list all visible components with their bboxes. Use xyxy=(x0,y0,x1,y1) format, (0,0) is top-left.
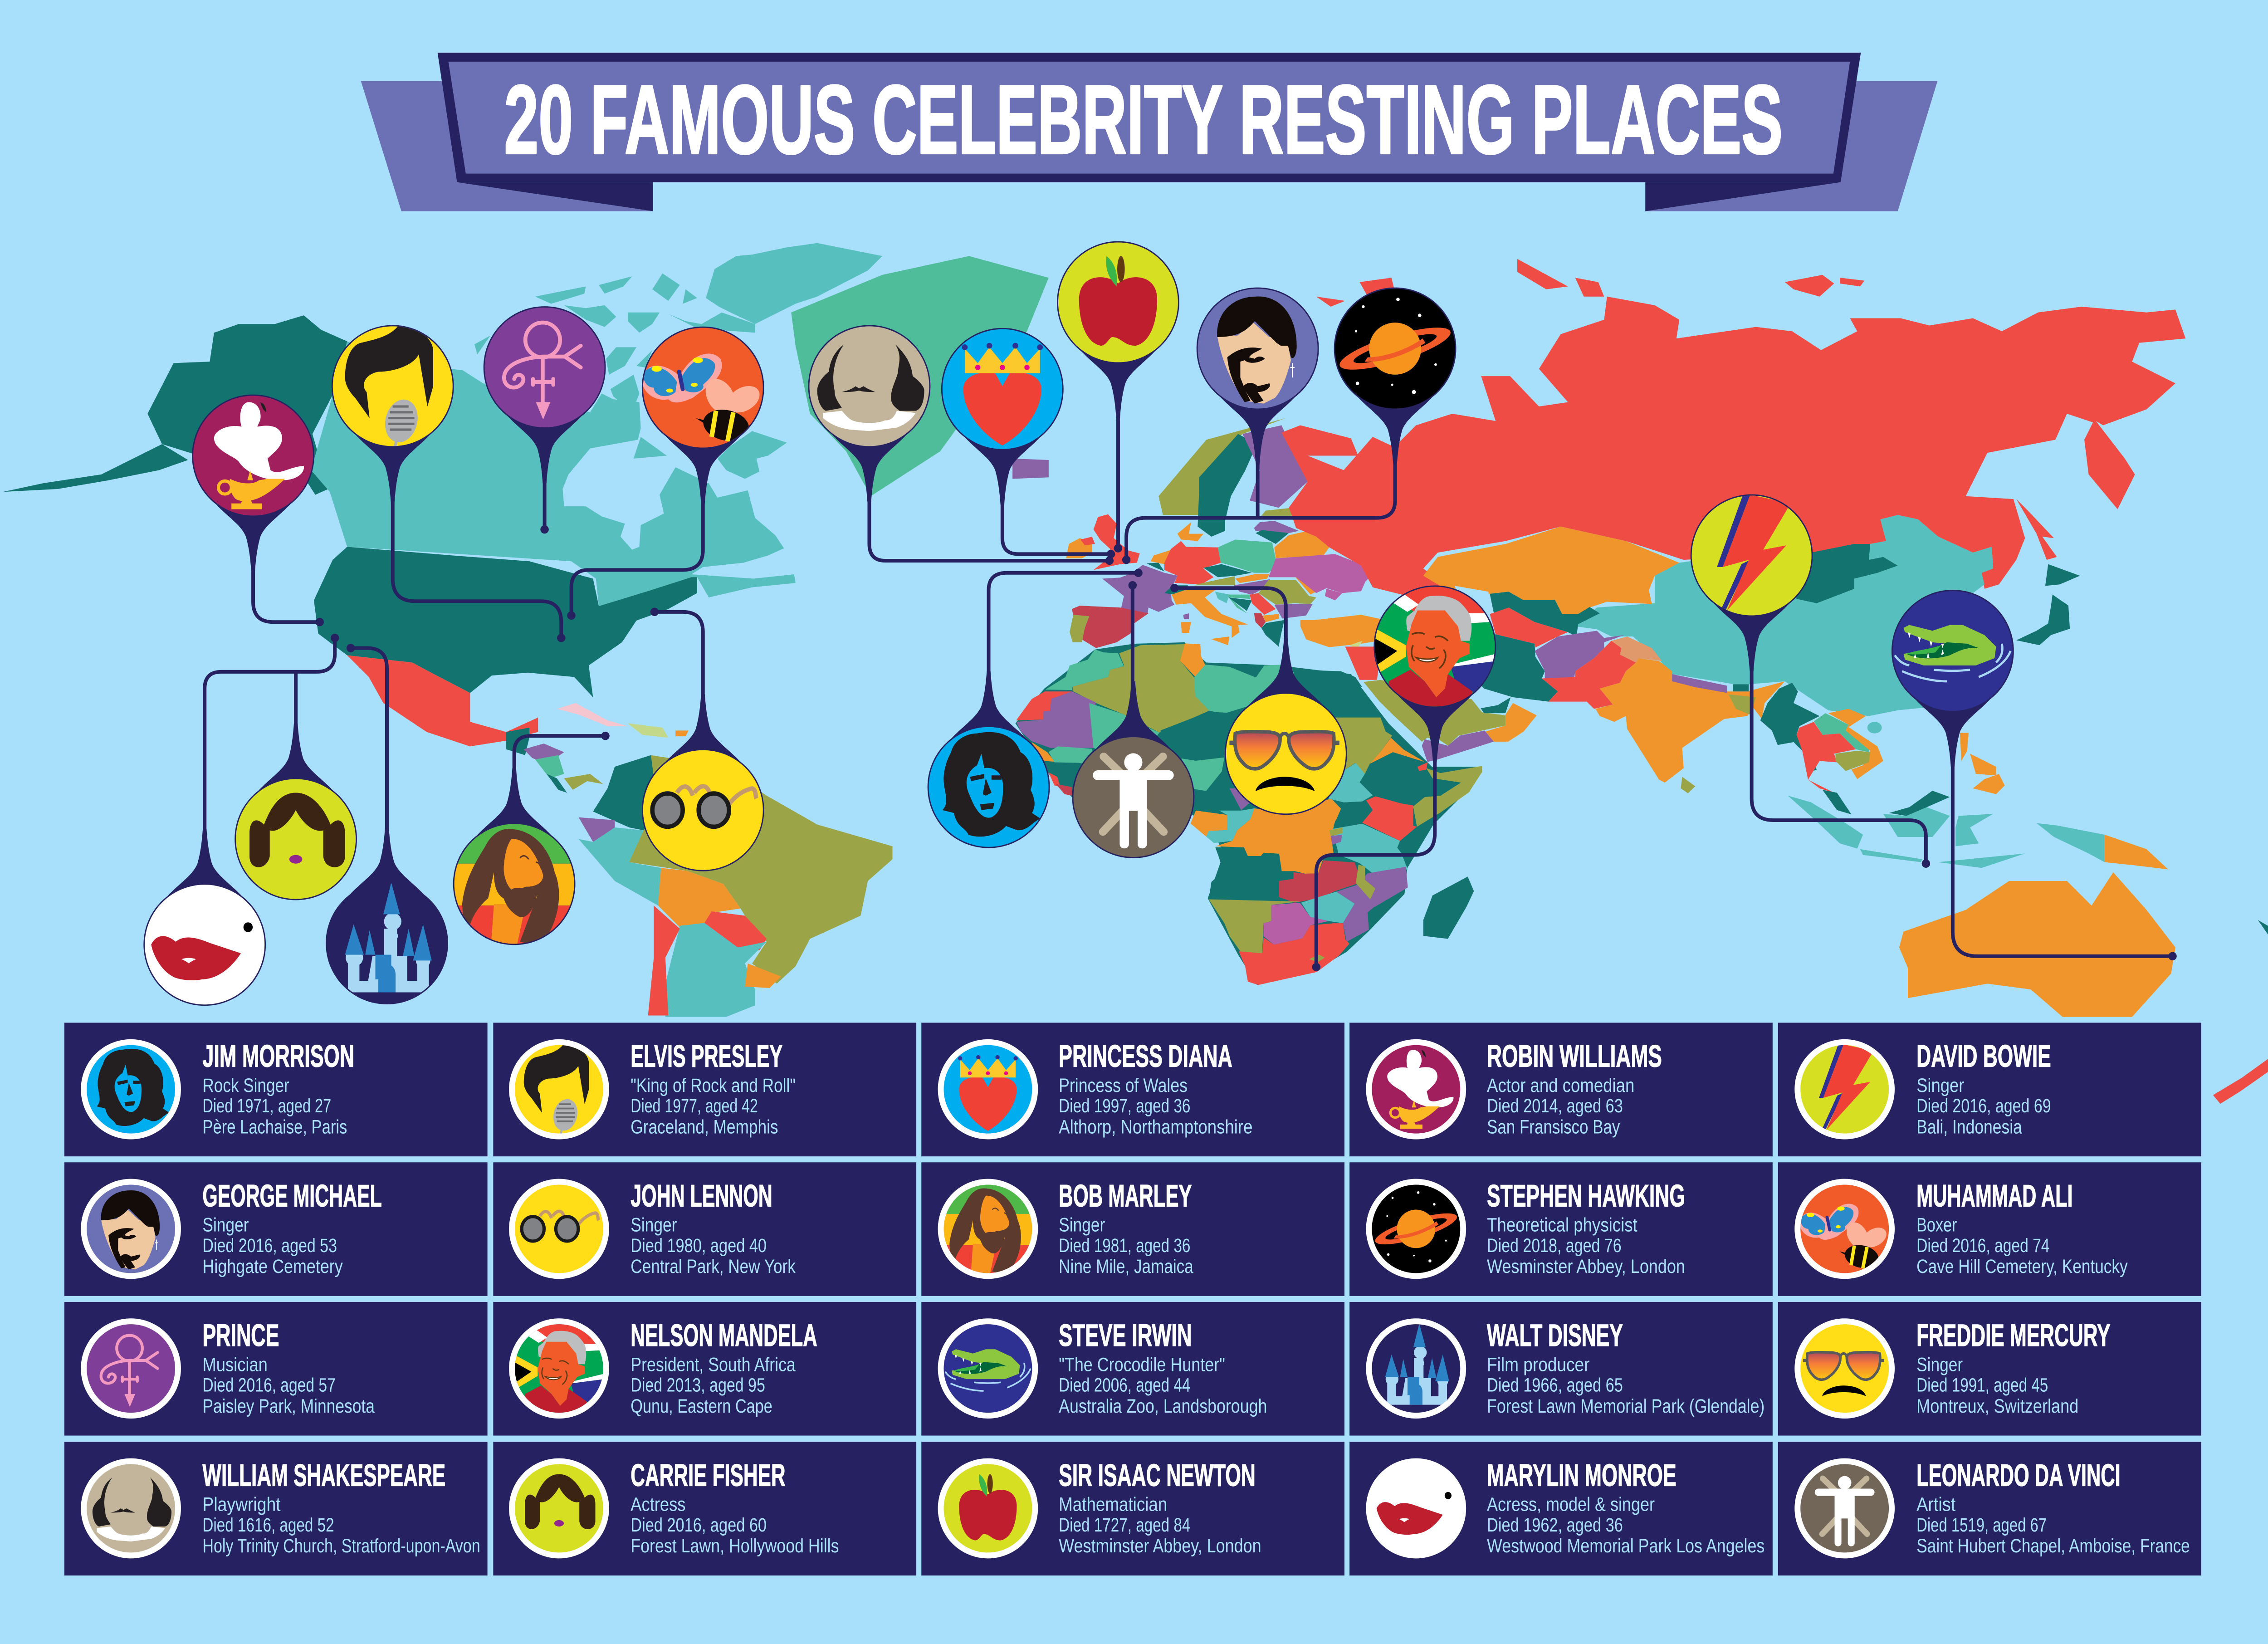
card: Prince: PRINCE xyxy=(202,1318,279,1353)
card: Muhammad Ali: MUHAMMAD ALI xyxy=(1916,1179,2073,1213)
card: Stephen Hawking xyxy=(1349,1162,1773,1296)
card: Sir Isaac Newton: Mathematician xyxy=(1059,1494,1167,1516)
card: Walt Disney: Died 1966, aged 65 xyxy=(1487,1375,1623,1396)
card: Walt Disney: WALT DISNEY xyxy=(1487,1318,1623,1353)
card: John Lennon: Central Park, New York xyxy=(631,1256,796,1277)
pin: Jim Morrison xyxy=(928,569,1143,848)
Russia and polar islands xyxy=(1281,259,2185,600)
card: Princess Diana: Princess of Wales xyxy=(1059,1075,1188,1096)
North America xyxy=(3,243,1049,793)
card: Nelson Mandela: Died 2013, aged 95 xyxy=(631,1375,765,1396)
pin: Leonardo da Vinci xyxy=(1072,581,1194,858)
pin: Prince xyxy=(484,306,606,533)
card: Elvis Presley xyxy=(493,1023,916,1156)
card: Carrie Fisher: Actress xyxy=(631,1494,685,1516)
card: Stephen Hawking: Wesminster Abbey, London xyxy=(1487,1256,1685,1277)
card: Nelson Mandela: NELSON MANDELA xyxy=(631,1318,817,1353)
card: Marylin Monroe: MARYLIN MONROE xyxy=(1487,1458,1677,1493)
pin: Nelson Mandela xyxy=(1312,586,1496,971)
card: Robin Williams: San Fransisco Bay xyxy=(1487,1116,1620,1138)
pin: George Michael xyxy=(1197,288,1319,518)
card: Muhammad Ali: Died 2016, aged 74 xyxy=(1916,1235,2049,1257)
card: Marylin Monroe: Acress, model & singer xyxy=(1487,1494,1655,1516)
card: Carrie Fisher: CARRIE FISHER xyxy=(631,1458,786,1493)
pin: Steve Irwin xyxy=(1892,590,2177,960)
card: Stephen Hawking: Theoretical physicist xyxy=(1487,1214,1637,1236)
card: Elvis Presley: Graceland, Memphis xyxy=(631,1116,778,1138)
pin: David Bowie xyxy=(1691,494,1930,868)
card: Bob Marley: Died 1981, aged 36 xyxy=(1059,1235,1190,1257)
card: Walt Disney: Film producer xyxy=(1487,1354,1589,1375)
card: Nelson Mandela: Qunu, Eastern Cape xyxy=(631,1395,772,1417)
pin: Carrie Fisher xyxy=(235,671,357,900)
card: Leonardo da Vinci: Saint Hubert Chapel, Amboise, France xyxy=(1916,1535,2190,1557)
pin: Walt Disney xyxy=(326,644,448,1004)
card: Nelson Mandela xyxy=(493,1302,916,1436)
card: George Michael: Died 2016, aged 53 xyxy=(202,1235,337,1257)
New Zealand fragments xyxy=(2213,920,2268,1104)
card: George Michael: Singer xyxy=(202,1214,249,1236)
card: Sir Isaac Newton: Westminster Abbey, London xyxy=(1059,1535,1261,1557)
pin: Marilyn Monroe xyxy=(143,634,339,1006)
card: Jim Morrison: Died 1971, aged 27 xyxy=(202,1095,331,1117)
pin: Muhammad Ali xyxy=(567,327,764,620)
card: William Shakespeare: Holy Trinity Church, Stratford-upon-Avon xyxy=(202,1535,480,1557)
pin: Sir Isaac Newton xyxy=(1057,241,1179,553)
card: Freddie Mercury: FREDDIE MERCURY xyxy=(1916,1318,2110,1353)
card: Bob Marley: Nine Mile, Jamaica xyxy=(1059,1256,1193,1277)
card: Muhammad Ali: Cave Hill Cemetery, Kentucky xyxy=(1916,1256,2128,1277)
card: Prince: Musician xyxy=(202,1354,268,1375)
world map xyxy=(3,243,2185,1017)
card: Stephen Hawking: Died 2018, aged 76 xyxy=(1487,1235,1622,1257)
card: Robin Williams: Actor and comedian xyxy=(1487,1075,1634,1096)
card: George Michael: Highgate Cemetery xyxy=(202,1256,343,1277)
Africa xyxy=(1016,642,1482,985)
card: William Shakespeare: Playwright xyxy=(202,1494,281,1516)
pin: Robin Williams xyxy=(192,395,324,626)
pin: Bob Marley xyxy=(453,732,610,945)
card: David Bowie: Died 2016, aged 69 xyxy=(1916,1095,2051,1117)
card: David Bowie: Bali, Indonesia xyxy=(1916,1116,2022,1138)
card: Jim Morrison: Père Lachaise, Paris xyxy=(202,1116,347,1138)
card: John Lennon xyxy=(493,1162,916,1296)
card: Robin Williams: ROBIN WILLIAMS xyxy=(1487,1039,1662,1074)
card: Elvis Presley: "King of Rock and Roll" xyxy=(631,1075,796,1096)
card: Jim Morrison: JIM MORRISON xyxy=(202,1039,354,1074)
card: Robin Williams xyxy=(1349,1023,1773,1156)
Europe xyxy=(1066,418,1388,650)
card: Carrie Fisher: Forest Lawn, Hollywood Hills xyxy=(631,1535,839,1557)
title banner xyxy=(361,53,1937,211)
pin: Freddie Mercury xyxy=(1170,584,1347,815)
card: David Bowie xyxy=(1778,1023,2201,1156)
Asia xyxy=(1345,515,2168,869)
card: Sir Isaac Newton: Died 1727, aged 84 xyxy=(1059,1514,1190,1536)
card: Princess Diana: Died 1997, aged 36 xyxy=(1059,1095,1190,1117)
card: Freddie Mercury xyxy=(1778,1302,2201,1436)
card: George Michael xyxy=(64,1162,488,1296)
pin: Elvis Presley xyxy=(332,325,565,642)
card: David Bowie: DAVID BOWIE xyxy=(1916,1039,2051,1074)
card: William Shakespeare: WILLIAM SHAKESPEARE xyxy=(202,1458,445,1493)
card: Prince: Paisley Park, Minnesota xyxy=(202,1395,375,1417)
pin: Stephen Hawking xyxy=(1122,288,1456,564)
card: Elvis Presley: ELVIS PRESLEY xyxy=(631,1039,782,1074)
card: Freddie Mercury: Died 1991, aged 45 xyxy=(1916,1375,2048,1396)
card: Steve Irwin: "The Crocodile Hunter" xyxy=(1059,1354,1225,1375)
South America xyxy=(579,755,892,1017)
card: William Shakespeare xyxy=(64,1442,488,1576)
card: Walt Disney xyxy=(1349,1302,1773,1436)
card: Leonardo da Vinci xyxy=(1778,1442,2201,1576)
pin: John Lennon xyxy=(642,608,764,871)
card: Bob Marley xyxy=(921,1162,1344,1296)
card: Steve Irwin xyxy=(921,1302,1344,1436)
card: Freddie Mercury: Singer xyxy=(1916,1354,1963,1375)
card: Prince: Died 2016, aged 57 xyxy=(202,1375,336,1396)
card: Marylin Monroe: Died 1962, aged 36 xyxy=(1487,1514,1623,1536)
card: Steve Irwin: Australia Zoo, Landsborough xyxy=(1059,1395,1267,1417)
card: Sir Isaac Newton xyxy=(921,1442,1344,1576)
card: Princess Diana xyxy=(921,1023,1344,1156)
card: Muhammad Ali: Boxer xyxy=(1916,1214,1957,1236)
card: Jim Morrison: Rock Singer xyxy=(202,1075,289,1096)
card: Robin Williams: Died 2014, aged 63 xyxy=(1487,1095,1623,1117)
card: Carrie Fisher xyxy=(493,1442,916,1576)
card: John Lennon: Died 1980, aged 40 xyxy=(631,1235,767,1257)
card: Muhammad Ali xyxy=(1778,1162,2201,1296)
card: David Bowie: Singer xyxy=(1916,1075,1964,1096)
card: William Shakespeare: Died 1616, aged 52 xyxy=(202,1514,334,1536)
card: Steve Irwin: STEVE IRWIN xyxy=(1059,1318,1192,1353)
card: Carrie Fisher: Died 2016, aged 60 xyxy=(631,1514,767,1536)
card: Marylin Monroe xyxy=(1349,1442,1773,1576)
card: Steve Irwin: Died 2006, aged 44 xyxy=(1059,1375,1190,1396)
card: Nelson Mandela: President, South Africa xyxy=(631,1354,796,1375)
card: Jim Morrison xyxy=(64,1023,488,1156)
pin: Princess Diana xyxy=(941,328,1115,558)
card: John Lennon: Singer xyxy=(631,1214,677,1236)
card: Marylin Monroe: Westwood Memorial Park Los Angeles xyxy=(1487,1535,1765,1557)
card: Walt Disney: Forest Lawn Memorial Park (Glendale) xyxy=(1487,1395,1765,1417)
card: Leonardo da Vinci: Died 1519, aged 67 xyxy=(1916,1514,2047,1536)
card: Prince xyxy=(64,1302,488,1436)
card: Sir Isaac Newton: SIR ISAAC NEWTON xyxy=(1059,1458,1256,1493)
card: Leonardo da Vinci: Artist xyxy=(1916,1494,1955,1516)
card: Princess Diana: Althorp, Northamptonshire xyxy=(1059,1116,1252,1138)
card: Freddie Mercury: Montreux, Switzerland xyxy=(1916,1395,2078,1417)
card: George Michael: GEORGE MICHAEL xyxy=(202,1179,382,1213)
pin: William Shakespeare xyxy=(808,325,1114,565)
card: Leonardo da Vinci: LEONARDO DA VINCI xyxy=(1916,1458,2121,1493)
card: Princess Diana: PRINCESS DIANA xyxy=(1059,1039,1232,1074)
card: Elvis Presley: Died 1977, aged 42 xyxy=(631,1095,758,1117)
card: John Lennon: JOHN LENNON xyxy=(631,1179,772,1213)
card: Bob Marley: BOB MARLEY xyxy=(1059,1179,1192,1213)
card: Bob Marley: Singer xyxy=(1059,1214,1105,1236)
Australia xyxy=(1899,872,2175,1017)
card: Stephen Hawking: STEPHEN HAWKING xyxy=(1487,1179,1685,1213)
